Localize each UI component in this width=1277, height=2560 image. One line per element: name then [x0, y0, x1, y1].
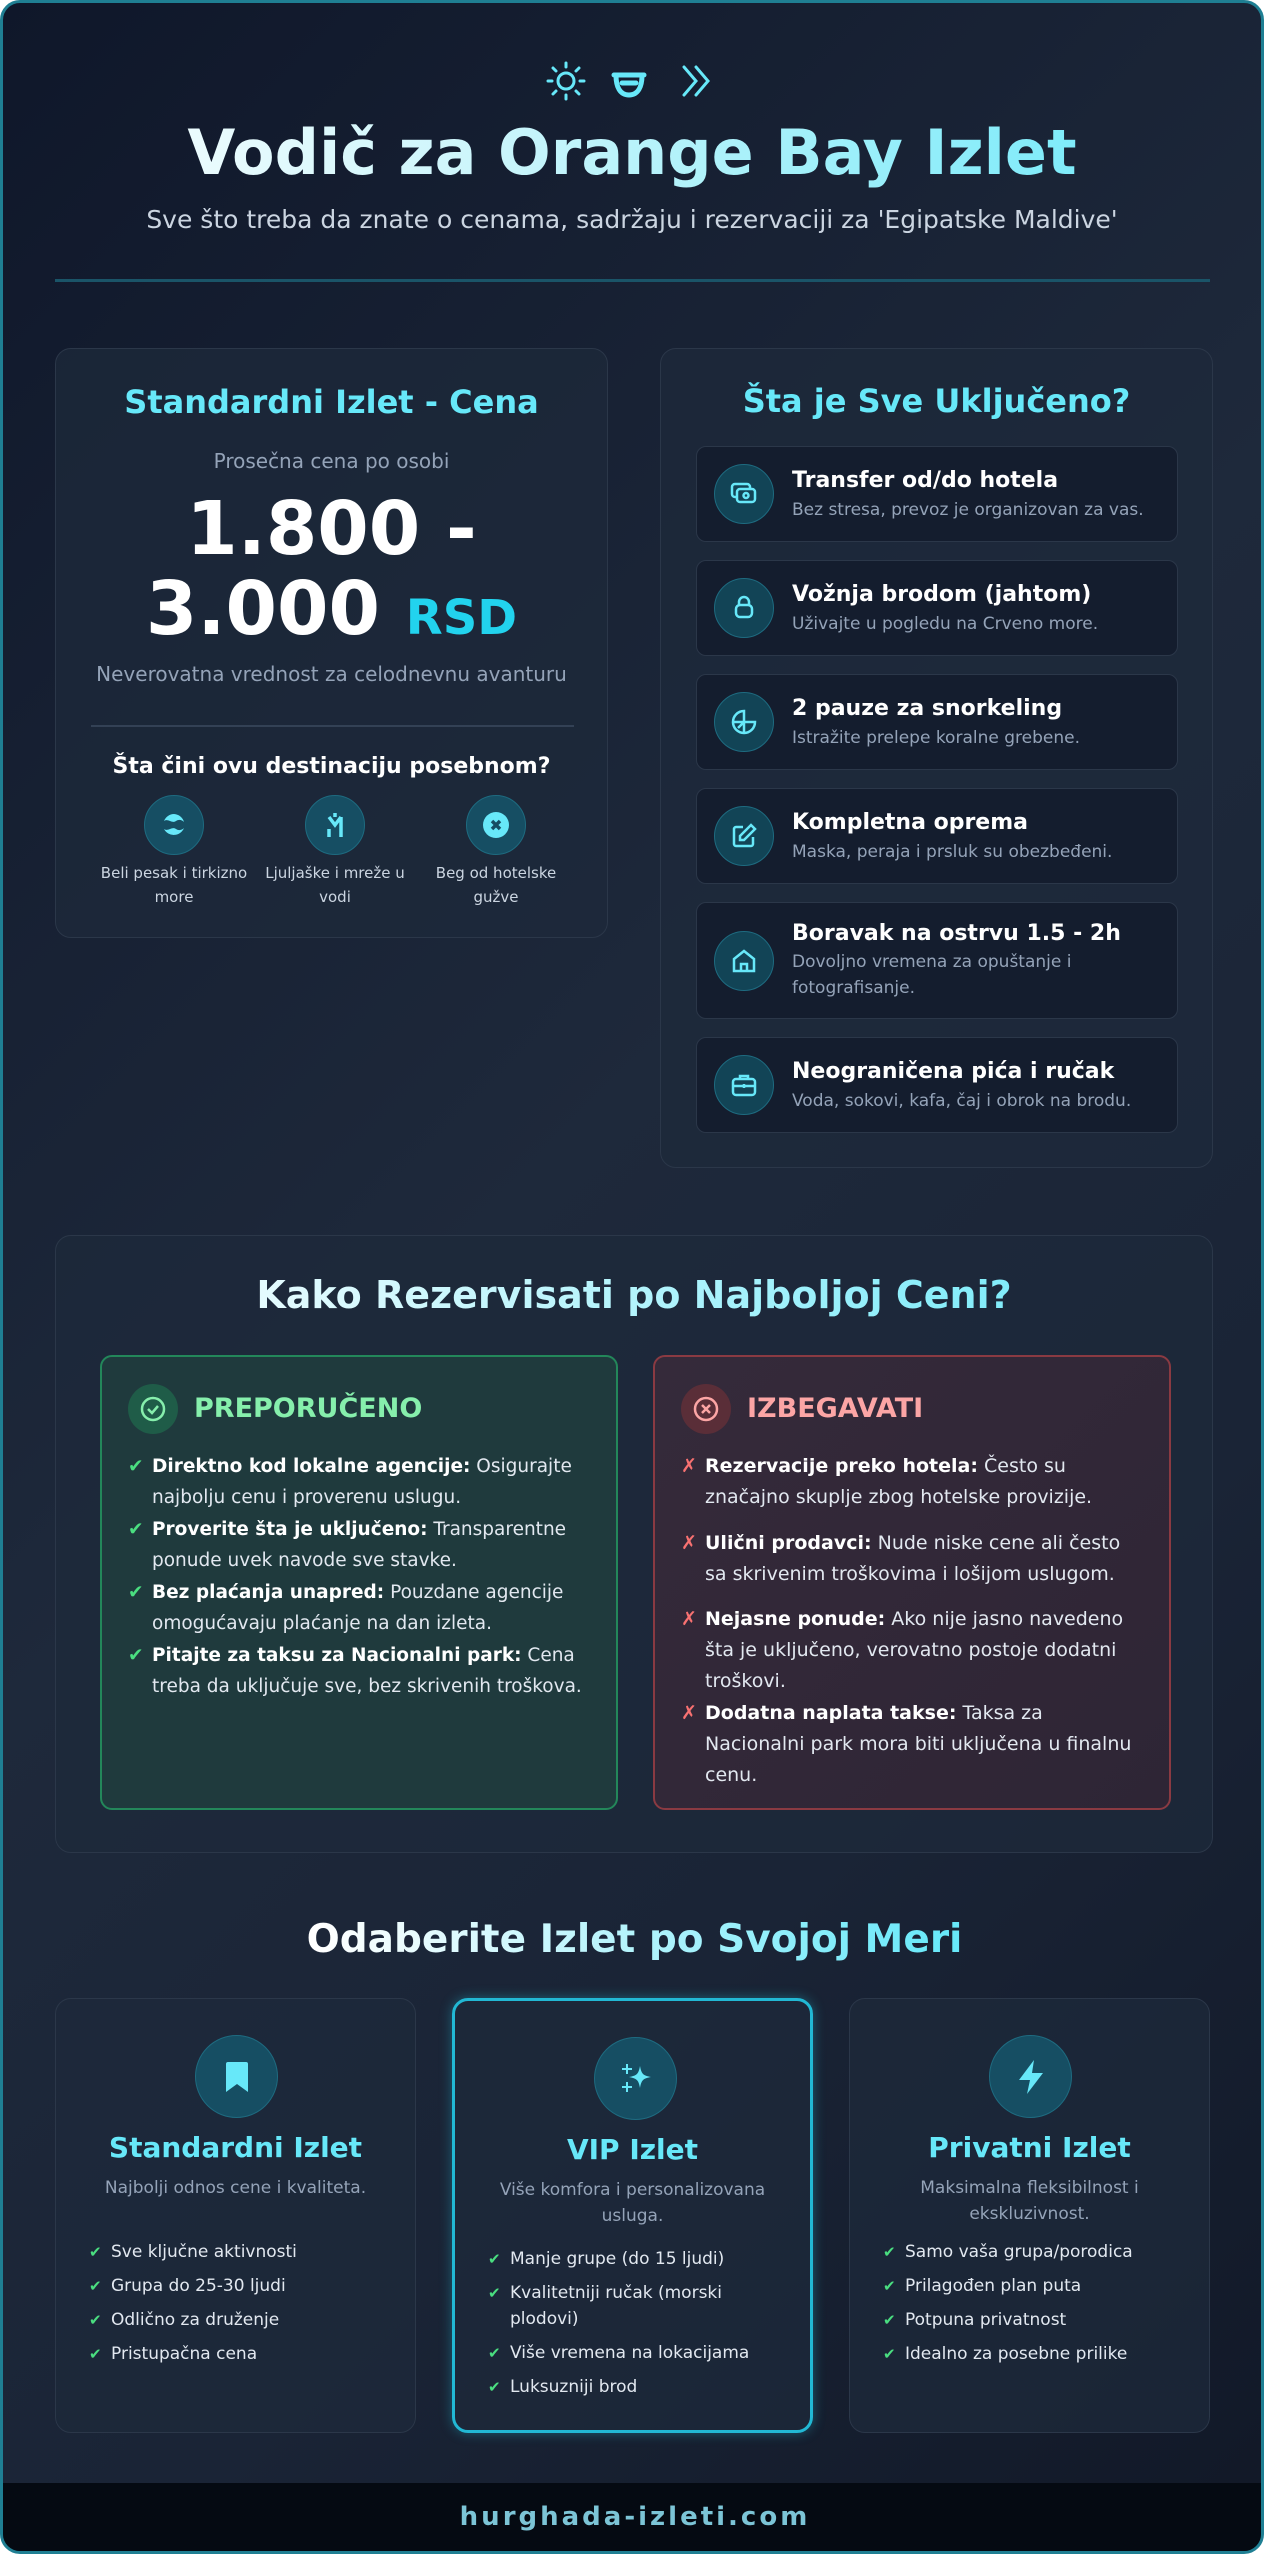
included heading: Šta je Sve Uključeno?: [743, 382, 1130, 420]
subtitle: Sve što treba da znate o cenama, sadržaju i rezervaciji za 'Egipatske Maldive': [146, 205, 1118, 234]
recommended list: ✔: [128, 1456, 144, 1477]
card: vip: Luksuzniji brod: [510, 2377, 637, 2397]
avoid list: [681, 1454, 1131, 1786]
booking heading: [55, 1273, 1213, 1317]
recommended list: ✔: [128, 1519, 144, 1540]
panel: included: [660, 348, 1213, 1168]
card: vip: Kvalitetniji ručak (morski plodovi): [510, 2283, 722, 2329]
price value: 3.000 RSD: [146, 566, 517, 652]
features: [101, 795, 556, 906]
header icons: [546, 62, 710, 100]
avoid list: ✗: [681, 1702, 697, 1724]
card: private: Maksimalna fleksibilnost i ekskluzivnost.: [920, 2178, 1139, 2224]
item: drinks: Voda, sokovi, kafa, čaj i obrok na brodu.: [792, 1091, 1131, 1111]
item: boat: [696, 560, 1178, 656]
box: avoid: [653, 1355, 1171, 1810]
card: private: Privatni Izlet: [928, 2131, 1131, 2164]
avoid header: [681, 1384, 923, 1434]
card: private: Prilagođen plan puta: [905, 2276, 1081, 2296]
recommended list: Bez plaćanja unapred: Pouzdane agencije omogućavaju plaćanje na dan izleta.: [152, 1582, 563, 1634]
avoid list: ✗: [681, 1608, 697, 1630]
avoid list: Rezervacije preko hotela: Često su značajno skuplje zbog hotelske provizije.: [705, 1455, 1092, 1508]
item: island: Dovoljno vremena za opuštanje i fotografisanje.: [792, 952, 1071, 998]
item: equipment: Kompletna oprema: [792, 810, 1028, 835]
card: private: Samo vaša grupa/porodica: [905, 2242, 1133, 2262]
card: private: Idealno za posebne prilike: [905, 2344, 1127, 2364]
avoid list: ✗: [681, 1532, 697, 1554]
options heading: [3, 1917, 1266, 1962]
avoid list: ✗: [681, 1455, 697, 1477]
price value: [146, 486, 517, 652]
item: snorkeling: 2 pauze za snorkeling: [792, 696, 1062, 721]
footer: [3, 2483, 1267, 2560]
card: standard: [55, 1998, 416, 2433]
recommended header: PREPORUČENO: [194, 1393, 422, 1424]
item: island: [696, 902, 1178, 1019]
feature: escape: Beg od hotelske gužve: [436, 864, 556, 906]
box: recommended: [100, 1355, 618, 1810]
price heading: Standardni Izlet - Cena: [124, 383, 539, 421]
avoid header: IZBEGAVATI: [747, 1393, 923, 1424]
recommended list: ✔: [128, 1582, 144, 1603]
card: vip: [452, 1998, 813, 2433]
panel: booking: [55, 1235, 1213, 1853]
price label: Prosečna cena po osobi: [214, 449, 449, 473]
recommended header: [128, 1384, 422, 1434]
item: snorkeling: [696, 674, 1178, 770]
recommended list: Proverite šta je uključeno: Transparentne ponude uvek navode sve stavke.: [152, 1519, 566, 1571]
item: transfer: [696, 446, 1178, 542]
card: vip: Manje grupe (do 15 ljudi): [510, 2249, 724, 2269]
recommended list: Pitajte za taksu za Nacionalni park: Cena treba da uključuje sve, bez skrivenih troškova.: [152, 1645, 582, 1697]
item: island: Boravak na ostrvu 1.5 - 2h: [792, 921, 1121, 946]
card: standard: Odlično za druženje: [111, 2310, 279, 2330]
item: drinks: Neograničena pića i ručak: [792, 1059, 1114, 1084]
avoid list: Dodatna naplata takse: Taksa za Nacionalni park mora biti uključena u finalnu cenu.: [705, 1702, 1131, 1786]
price value: 1.800 -: [186, 486, 477, 572]
item: boat: Uživajte u pogledu na Crveno more.: [792, 614, 1098, 634]
avoid list: Nejasne ponude: Ako nije jasno navedeno šta je uključeno, verovatno postoje dodatni troškovi.: [705, 1608, 1123, 1692]
recommended list: Direktno kod lokalne agencije: Osigurajte najbolju cenu i proverenu uslugu.: [152, 1456, 572, 1508]
item: transfer: Transfer od/do hotela: [792, 468, 1058, 493]
card: private: Potpuna privatnost: [905, 2310, 1066, 2330]
feature: sand: Beli pesak i tirkizno more: [101, 864, 247, 906]
card: standard: Sve ključne aktivnosti: [111, 2242, 297, 2262]
title: [3, 113, 1261, 193]
recommended list: ✔: [128, 1645, 144, 1666]
special heading: Šta čini ovu destinaciju posebnom?: [113, 754, 550, 779]
card: vip: Više vremena na lokacijama: [510, 2343, 749, 2363]
title: Vodič za Orange Bay Izlet: [187, 116, 1077, 189]
card: standard: Standardni Izlet: [109, 2131, 362, 2164]
card: standard: Grupa do 25-30 ljudi: [111, 2276, 286, 2296]
card: standard: Pristupačna cena: [111, 2344, 257, 2364]
booking heading: Kako Rezervisati po Najboljoj Ceni?: [256, 1273, 1012, 1317]
feature: hammocks: Ljuljaške i mreže u vodi: [265, 864, 405, 906]
card: vip: Više komfora i personalizovana usluga.: [500, 2180, 765, 2226]
item: drinks: [696, 1037, 1178, 1133]
item: boat: Vožnja brodom (jahtom): [792, 582, 1091, 607]
card: standard: Najbolji odnos cene i kvaliteta.: [105, 2178, 366, 2198]
card: vip: VIP Izlet: [567, 2133, 698, 2166]
item: snorkeling: Istražite prelepe koralne grebene.: [792, 728, 1080, 748]
item: equipment: Maska, peraja i prsluk su obezbeđeni.: [792, 842, 1112, 862]
options heading: Odaberite Izlet po Svojoj Meri: [307, 1917, 962, 1962]
avoid list: Ulični prodavci: Nude niske cene ali često sa skrivenim troškovima i lošijom uslugom.: [705, 1532, 1120, 1585]
recommended list: [128, 1456, 582, 1697]
card: private: [849, 1998, 1210, 2433]
feature: hammocks: [265, 795, 405, 906]
footer: hurghada-izleti.com: [460, 2502, 810, 2532]
item: transfer: Bez stresa, prevoz je organizovan za vas.: [792, 500, 1144, 520]
feature: sand: [101, 795, 247, 906]
feature: escape: [436, 795, 556, 906]
price note: Neverovatna vrednost za celodnevnu avanturu: [96, 662, 567, 686]
panel: price: [55, 348, 608, 938]
item: equipment: [696, 788, 1178, 884]
